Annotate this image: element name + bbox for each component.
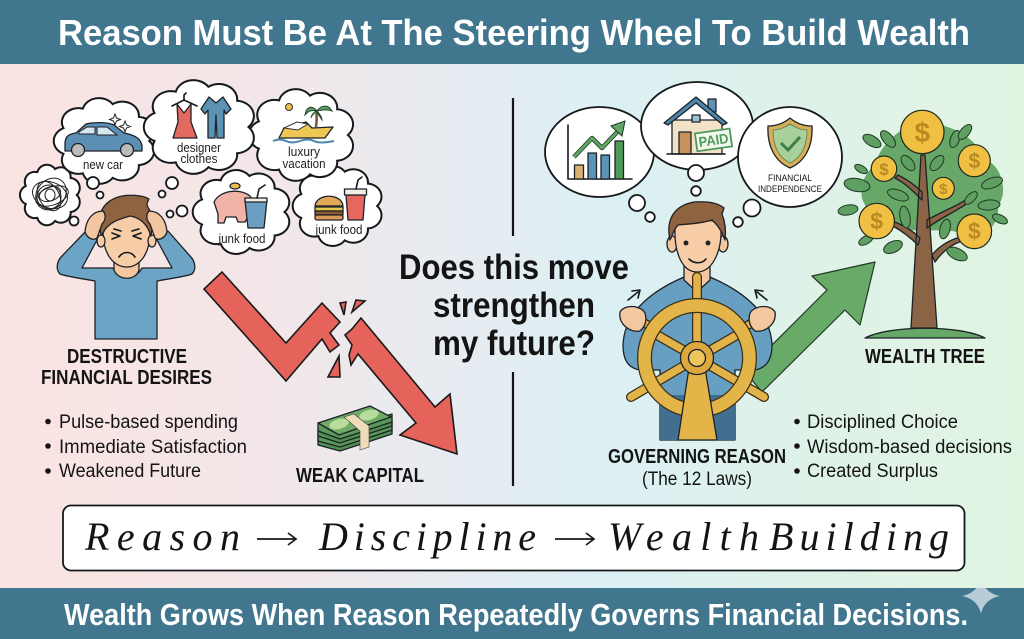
hands	[85, 211, 105, 239]
formula box: Building	[769, 514, 949, 559]
list: destructive traits: Weakened Future	[59, 461, 201, 482]
wheel spokes	[631, 277, 764, 397]
cloud: junk food drink and burger: junk food	[315, 222, 362, 237]
gold coins: $	[870, 208, 883, 234]
arrow: broken red decline	[204, 272, 457, 454]
cloud: luxury vacation: luxury	[288, 144, 320, 159]
arrow: green growth	[745, 262, 875, 392]
list: governing traits: Created Surplus	[807, 461, 938, 482]
central question: Does this move	[399, 248, 629, 287]
cloud: new car: new car	[83, 157, 124, 172]
wheel column	[678, 368, 717, 440]
icon: sparkle watermark	[962, 578, 1000, 614]
cloud: designer clothes: designer	[177, 140, 222, 155]
list: destructive traits: Immediate Satisfaction	[59, 437, 247, 458]
cloud: new car	[54, 98, 154, 184]
wheel hub	[680, 342, 714, 374]
cloud: designer clothes	[144, 80, 254, 174]
neck	[684, 262, 710, 292]
fists	[639, 318, 653, 330]
central question: strengthen	[433, 286, 595, 325]
figure: stressed man	[57, 195, 195, 339]
motion arrows	[628, 290, 767, 300]
cloud: junk food piggy bank	[193, 170, 289, 254]
list: governing traits	[794, 412, 1012, 482]
icon: wealth tree	[837, 110, 1009, 338]
list: destructive traits	[45, 412, 247, 482]
heading: governing reason: GOVERNING REASON	[608, 446, 786, 468]
figure: calm man at the wheel	[620, 202, 775, 440]
bubble: paid house: PAID	[698, 130, 729, 150]
central question: my future?	[433, 324, 595, 363]
formula arrows	[257, 533, 594, 545]
thought bubbles left	[70, 177, 188, 226]
cloud: junk food piggy bank: junk food	[218, 231, 266, 246]
bubble: financial independence	[738, 107, 842, 207]
ground	[865, 328, 985, 338]
cloud: junk food drink and burger	[293, 166, 381, 246]
leaves	[837, 122, 1009, 264]
icon: golden steering wheel	[631, 277, 764, 440]
wheel rim	[644, 306, 750, 410]
bubble: financial independence: FINANCIAL	[768, 173, 812, 183]
title banner: Reason Must Be At The Steering Wheel To Build Wealth	[58, 12, 970, 53]
trunk and branches	[893, 155, 973, 328]
label: weak capital: WEAK CAPITAL	[296, 465, 424, 487]
head	[103, 216, 150, 267]
list: destructive traits: Pulse-based spending	[59, 412, 238, 433]
gold coins: $	[915, 117, 931, 148]
heading: governing reason	[608, 446, 786, 490]
central divider	[512, 98, 514, 486]
neck	[114, 262, 139, 278]
formula box: Reason	[84, 514, 240, 559]
central question	[399, 248, 629, 363]
heading: destructive financial desires	[41, 346, 212, 389]
bubble: growth chart	[545, 107, 654, 197]
bubble: financial independence: INDEPENDENCE	[758, 184, 822, 194]
formula box	[63, 506, 964, 570]
title banner	[0, 0, 1024, 64]
gold coins	[859, 110, 992, 249]
gold coins: $	[968, 218, 981, 244]
gold coins: $	[939, 181, 948, 198]
cloud: designer clothes: clothes	[180, 151, 218, 166]
bubble: paid house	[641, 82, 753, 170]
gold coins: $	[879, 160, 889, 179]
formula box: Wealth	[608, 514, 759, 559]
head	[667, 236, 677, 252]
icon: stack of cash	[318, 406, 392, 451]
heading: governing reason: (The 12 Laws)	[642, 469, 752, 490]
thought bubbles right	[629, 165, 760, 227]
panel: positive thought bubbles	[545, 82, 842, 227]
panel: destructive thought clouds	[20, 80, 381, 254]
footer banner	[0, 588, 1024, 639]
cloud: luxury vacation: vacation	[282, 156, 326, 171]
torso	[623, 277, 772, 440]
foliage	[862, 122, 1003, 236]
list: governing traits: Wisdom-based decisions	[807, 437, 1012, 458]
formula box: Discipline	[318, 514, 536, 559]
cloud: scribble	[20, 165, 80, 225]
gold coins: $	[968, 150, 980, 173]
shirt	[57, 231, 195, 339]
list: governing traits: Disciplined Choice	[807, 412, 958, 433]
label: wealth tree: WEALTH TREE	[865, 346, 985, 368]
cloud: luxury vacation	[249, 89, 353, 181]
face	[112, 229, 141, 257]
hair	[99, 195, 152, 236]
heading: destructive financial desires: DESTRUCTIVE	[67, 346, 187, 368]
heading: destructive financial desires: FINANCIAL DESIRES	[41, 367, 212, 389]
